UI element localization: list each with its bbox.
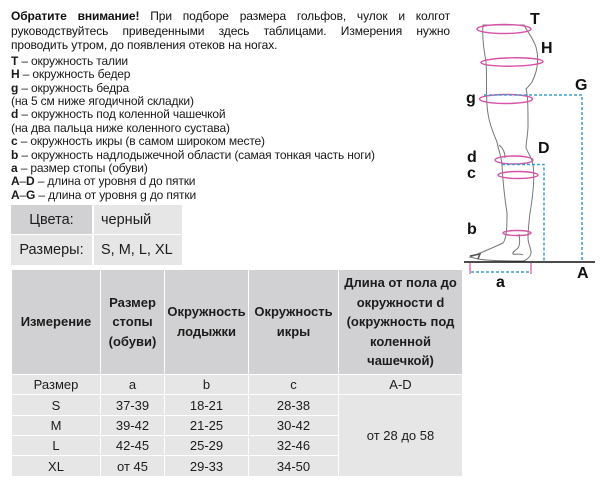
- row: L: [12, 436, 338, 455]
- table header: (окружность под: [347, 314, 454, 329]
- table header: окружности d: [357, 295, 444, 310]
- row: S: S: [52, 398, 60, 412]
- row: XL: от 45: [117, 458, 148, 474]
- measurement legend: (на два пальца ниже коленного сустава): [11, 121, 230, 135]
- intro text: руководствуйтесь приведенными здесь таблицами. Измерения нужно: [11, 24, 450, 38]
- table header: Окружность: [254, 304, 333, 319]
- merged length cell: от 28 до 58: [367, 428, 434, 443]
- row: XL: 29-33: [190, 458, 223, 474]
- size table: [12, 270, 462, 476]
- row: S: 28-38: [277, 398, 310, 412]
- measurement legend: A–G – длина от уровня g до пятки: [11, 188, 196, 202]
- colors and sizes table: черный: [101, 212, 151, 228]
- table header: Длина от пола до: [344, 275, 457, 290]
- row: letters: Размер: [34, 377, 78, 392]
- measurement legend: d – окружность под коленной чашечкой: [11, 107, 225, 121]
- row: S: 18-21: [190, 398, 223, 412]
- row: M: [12, 416, 338, 435]
- colors and sizes table: Размеры:: [19, 242, 84, 258]
- intro text: проводить утром, до появления отеков на ногах.: [11, 38, 277, 52]
- leg measurement diagram: [464, 11, 595, 291]
- row: L: 25-29: [190, 438, 223, 453]
- diagram letters: G: [575, 77, 587, 94]
- table header: стопы: [112, 314, 153, 329]
- intro text: Обратите внимание! При подборе размера гольфов, чулок и колгот: [11, 9, 450, 23]
- colors and sizes table: [11, 205, 182, 265]
- row: S: [12, 395, 338, 415]
- dashed lines G and D: [471, 95, 582, 272]
- diagram letters: [466, 11, 589, 291]
- row: L: L: [52, 438, 60, 453]
- row: M: 21-25: [190, 418, 223, 433]
- row: letters: c: [290, 377, 297, 392]
- table header: коленной: [370, 334, 431, 349]
- table header: Измерение: [21, 314, 91, 329]
- measurement legend: c – окружность икры (в самом широком месте): [11, 134, 265, 148]
- diagram letters: d: [467, 149, 477, 166]
- diagram letters: g: [466, 90, 476, 107]
- foot length ticks: [470, 263, 531, 274]
- row: L: 32-46: [277, 438, 310, 453]
- diagram letters: D: [538, 140, 550, 157]
- pink measurement rings: [477, 24, 543, 236]
- row: letters: b: [203, 377, 210, 392]
- measurement legend: (на 5 см ниже ягодичной складки): [11, 94, 194, 108]
- table header: чашечкой): [367, 353, 434, 368]
- diagram letters: T: [530, 11, 540, 28]
- measurement legend: T – окружность талии: [11, 54, 128, 68]
- table header: (обуви): [109, 334, 156, 349]
- row: XL: 34-50: [277, 458, 310, 474]
- row: M: 30-42: [277, 418, 310, 433]
- row: letters: [12, 375, 462, 394]
- table header: [12, 270, 462, 374]
- row: M: M: [51, 418, 61, 433]
- measurement legend: g – окружность бедра: [11, 81, 129, 95]
- diagram letters: A: [577, 265, 589, 282]
- diagram letters: H: [541, 40, 553, 57]
- row: L: 42-45: [116, 438, 149, 453]
- row: M: 39-42: [116, 418, 149, 433]
- intro text: [11, 9, 450, 52]
- table header: икры: [277, 324, 310, 339]
- measurement legend: A–D – длина от уровня d до пятки: [11, 174, 195, 188]
- measurement legend: H – окружность бедер: [11, 67, 130, 81]
- row: letters: A-D: [389, 377, 412, 392]
- leg outline: [470, 25, 538, 261]
- measurement legend: b – окружность надлодыжечной области (самая тонкая часть ноги): [11, 148, 375, 162]
- measurement legend: [11, 54, 375, 202]
- table header: Окружность: [167, 304, 246, 319]
- merged length cell: [339, 395, 462, 476]
- colors and sizes table: Цвета:: [29, 212, 74, 228]
- row: S: 37-39: [116, 398, 149, 412]
- table header: лодыжки: [177, 324, 236, 339]
- row: XL: [12, 456, 338, 476]
- table header: Размер: [109, 295, 156, 310]
- diagram letters: c: [467, 165, 476, 182]
- row: letters: a: [129, 377, 136, 392]
- ground line: [464, 261, 595, 263]
- diagram letters: b: [467, 221, 477, 238]
- diagram letters: a: [496, 274, 505, 291]
- colors and sizes table: S, M, L, XL: [101, 242, 173, 258]
- row: XL: XL: [48, 458, 64, 474]
- measurement legend: a – размер стопы (обуви): [11, 161, 148, 175]
